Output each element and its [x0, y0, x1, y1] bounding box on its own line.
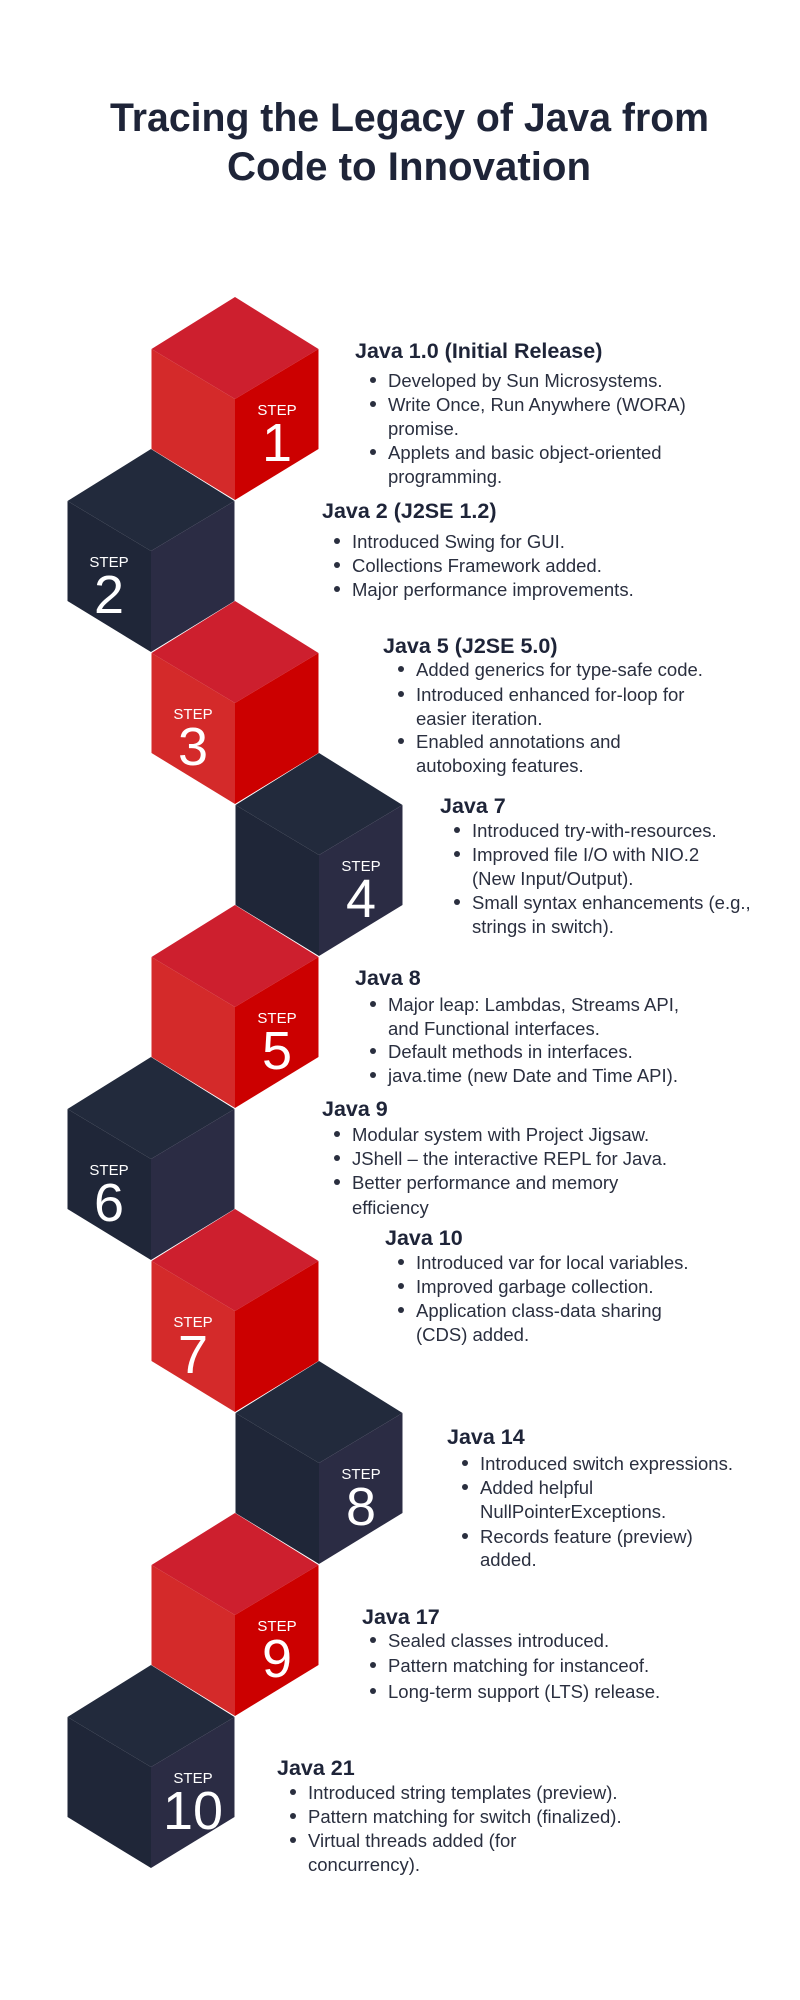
text block: Java 10 [385, 1226, 688, 1345]
text block: Java 14: Introduced switch expressions. [480, 1453, 733, 1474]
cube: step 9: 9 [262, 1629, 292, 1689]
text block: Java 8: Default methods in interfaces. [388, 1041, 633, 1062]
text block: Java 1.0: programming. [388, 466, 502, 487]
text block: Java 17 [362, 1605, 660, 1702]
text block: Java 5: Added generics for type-safe code. [416, 659, 703, 680]
text block: Java 5: Introduced enhanced for-loop for [416, 684, 684, 705]
cube: step 6 [68, 1057, 234, 1260]
text block: Java 10: Java 10 [385, 1226, 463, 1250]
text block: Java 5: easier iteration. [416, 708, 542, 729]
cube: step 8: STEP [341, 1466, 381, 1483]
text block: Java 2 [322, 499, 634, 600]
text block: Java 17: Sealed classes introduced. [388, 1630, 609, 1651]
cube: step 1: STEP [257, 402, 297, 419]
cube: step 1 [152, 297, 318, 500]
text block: Java 2: Java 2 (J2SE 1.2) [322, 499, 497, 523]
text block: Java 5: Enabled annotations and [416, 731, 621, 752]
text block: Java 7: Small syntax enhancements (e.g., [472, 892, 751, 913]
cube: step 7: STEP [173, 1314, 213, 1331]
cube: step 5 [152, 905, 318, 1108]
text block: Java 9: Better performance and memory [352, 1172, 619, 1193]
cube: step 10: 10 [163, 1781, 223, 1841]
cube: step 10 [68, 1665, 234, 1868]
text block: Java 9: efficiency [352, 1197, 430, 1218]
cube: step 9 [152, 1513, 318, 1716]
text block: Java 1.0: Write Once, Run Anywhere (WORA) [388, 394, 686, 415]
cube: step 7 [152, 1209, 318, 1412]
text block: Java 21 [277, 1756, 622, 1875]
title: Code to Innovation [227, 145, 591, 189]
cube: step 10: STEP [173, 1770, 213, 1787]
cube: step 3: STEP [173, 706, 213, 723]
text block: Java 14: Added helpful [480, 1477, 593, 1498]
text block: Java 5 [383, 634, 703, 776]
text block: Java 1.0: Applets and basic object-oriented [388, 442, 662, 463]
text block: Java 8: and Functional interfaces. [388, 1018, 600, 1039]
text block: Java 14: Java 14 [447, 1425, 525, 1449]
text block: Java 2: Introduced Swing for GUI. [352, 531, 565, 552]
text block: Java 2: Major performance improvements. [352, 579, 634, 600]
text block: Java 8: Major leap: Lambdas, Streams API, [388, 994, 679, 1015]
title [110, 96, 709, 189]
text block: Java 5: autoboxing features. [416, 755, 584, 776]
text block: Java 17: Long-term support (LTS) release. [388, 1681, 660, 1702]
title: Tracing the Legacy of Java from [110, 96, 709, 140]
text block: Java 7 [440, 794, 751, 937]
text block: Java 1.0: Developed by Sun Microsystems. [388, 370, 663, 391]
cube: step 2: STEP [89, 554, 129, 571]
cube: step 5: 5 [262, 1021, 292, 1081]
text block: Java 7: (New Input/Output). [472, 868, 633, 889]
text block: Java 1.0 [355, 339, 686, 487]
text block: Java 9: JShell – the interactive REPL for Java. [352, 1148, 667, 1169]
text block: Java 21: Java 21 [277, 1756, 355, 1780]
text block: Java 17: Java 17 [362, 1605, 440, 1629]
text block: Java 10: (CDS) added. [416, 1324, 529, 1345]
text block: Java 21: Pattern matching for switch (finalized). [308, 1806, 622, 1827]
text block: Java 14: added. [480, 1549, 537, 1570]
text block: Java 8 [355, 966, 679, 1086]
text block: Java 8: Java 8 [355, 966, 421, 990]
text block: Java 9: Modular system with Project Jigsaw. [352, 1124, 649, 1145]
text block: Java 7: Java 7 [440, 794, 506, 818]
text block: Java 21: Virtual threads added (for [308, 1830, 516, 1851]
text block: Java 21: Introduced string templates (preview). [308, 1782, 618, 1803]
text block: Java 1.0: promise. [388, 418, 459, 439]
text block: Java 9: Java 9 [322, 1097, 388, 1121]
cube: step 4 [236, 753, 402, 956]
cube: step 4: 4 [346, 869, 376, 929]
text block: Java 9 [322, 1097, 667, 1218]
text block: Java 7: Improved file I/O with NIO.2 [472, 844, 699, 865]
text block: Java 2: Collections Framework added. [352, 555, 602, 576]
cube: step 3: 3 [178, 717, 208, 777]
cube: step 5: STEP [257, 1010, 297, 1027]
text block: Java 14: NullPointerExceptions. [480, 1501, 666, 1522]
text block: Java 10: Application class-data sharing [416, 1300, 662, 1321]
cube: step 1: 1 [262, 413, 292, 473]
cube: step 6: STEP [89, 1162, 129, 1179]
text block: Java 7: strings in switch). [472, 916, 614, 937]
text block: Java 8: java.time (new Date and Time API). [387, 1065, 678, 1086]
cube: step 2: 2 [94, 565, 124, 625]
text block: Java 21: concurrency). [308, 1854, 420, 1875]
cube: step 7: 7 [178, 1325, 208, 1385]
cube: step 3 [152, 601, 318, 804]
cube: step 9: STEP [257, 1618, 297, 1635]
text block: Java 1.0: Java 1.0 (Initial Release) [355, 339, 602, 363]
text block: Java 10: Improved garbage collection. [416, 1276, 654, 1297]
cube: step 4: STEP [341, 858, 381, 875]
text block: Java 7: Introduced try-with-resources. [472, 820, 717, 841]
cube: step 8 [236, 1361, 402, 1564]
text block: Java 14 [447, 1425, 733, 1570]
cube: step 6: 6 [94, 1173, 124, 1233]
text block: Java 10: Introduced var for local variables. [416, 1252, 688, 1273]
text block: Java 5: Java 5 (J2SE 5.0) [383, 634, 558, 658]
cube: step 8: 8 [346, 1477, 376, 1537]
text block: Java 14: Records feature (preview) [480, 1526, 693, 1547]
cube: step 2 [68, 449, 234, 652]
text block: Java 17: Pattern matching for instanceof. [388, 1655, 649, 1676]
